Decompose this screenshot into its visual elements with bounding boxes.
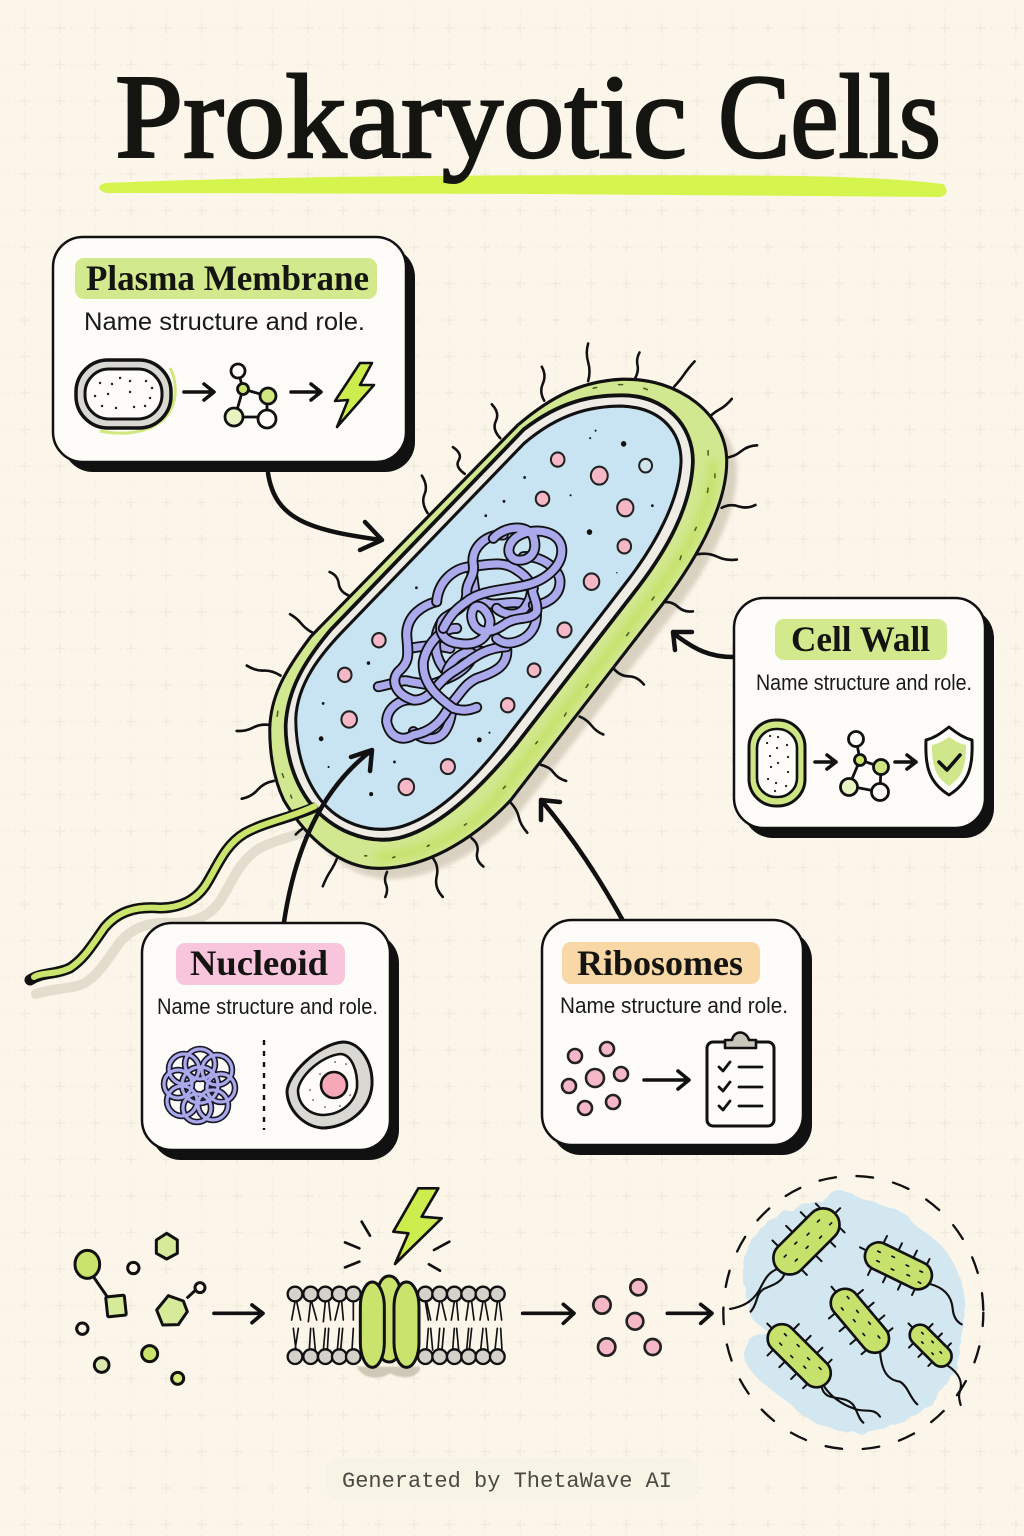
icon: DNA knot bbox=[164, 1049, 235, 1122]
panel: cell wall bbox=[734, 598, 994, 838]
flagellum shadow bbox=[36, 825, 325, 994]
bacterium 3 bbox=[814, 1273, 901, 1364]
bacterium 2 bbox=[851, 1228, 940, 1301]
energy bolt with rays bbox=[345, 1188, 449, 1271]
wall wash bbox=[375, 461, 713, 858]
arrow bbox=[895, 755, 916, 769]
panel: ribosomes bbox=[542, 920, 812, 1155]
arrow bbox=[523, 1304, 574, 1323]
arrow bbox=[644, 1071, 689, 1089]
icon: shield bbox=[926, 727, 972, 795]
icon: ribosome cluster bbox=[562, 1042, 628, 1115]
arrow: nucleoid bbox=[284, 750, 372, 922]
heading highlight bbox=[775, 619, 947, 660]
membrane channel bbox=[288, 1276, 505, 1378]
description: Name structure and role. bbox=[157, 994, 378, 1019]
footer credit: Generated by ThetaWave AI bbox=[342, 1469, 672, 1494]
icon: lightning bolt bbox=[335, 363, 374, 427]
heading: Nucleoid bbox=[190, 943, 328, 983]
icon: membrane capsule bbox=[76, 360, 175, 433]
channel shadow bbox=[357, 1367, 420, 1378]
bacterium 5 bbox=[897, 1312, 960, 1375]
arrow: ribosomes bbox=[541, 800, 622, 919]
cell shadow bbox=[280, 390, 737, 879]
arrow: cell wall bbox=[673, 632, 733, 657]
panel: nucleoid bbox=[142, 923, 399, 1160]
pili bbox=[237, 344, 757, 897]
icon: molecule network bbox=[225, 364, 276, 428]
ribosomes bbox=[338, 452, 652, 795]
molecule: ball and square bbox=[75, 1250, 126, 1317]
plasma membrane bbox=[286, 395, 693, 840]
heading highlight bbox=[75, 258, 377, 299]
wall speckles bbox=[277, 385, 715, 858]
title bbox=[100, 50, 946, 196]
molecule: hexagons and dots bbox=[77, 1233, 205, 1384]
heading: Plasma Membrane bbox=[86, 258, 369, 298]
footer credit bbox=[326, 1458, 698, 1500]
description: Name structure and role. bbox=[84, 308, 365, 336]
outcome group bbox=[523, 1176, 983, 1449]
heading: Ribosomes bbox=[577, 943, 743, 983]
flagellum bbox=[30, 806, 315, 980]
description: Name structure and role. bbox=[560, 993, 788, 1018]
arrow bbox=[184, 384, 214, 400]
lipid heads bbox=[288, 1287, 505, 1364]
icon: cell cross-section bbox=[287, 1042, 372, 1128]
flagella bbox=[730, 1268, 962, 1423]
nucleoid DNA bbox=[378, 528, 562, 739]
heading highlight bbox=[562, 942, 760, 984]
panel: plasma membrane bbox=[53, 237, 415, 472]
lipid tails bbox=[292, 1302, 502, 1350]
cytoplasm granules bbox=[319, 430, 654, 796]
title: Cells bbox=[718, 50, 941, 183]
description: Name structure and role. bbox=[756, 670, 972, 695]
ribosome dots bbox=[593, 1279, 661, 1356]
heading highlight bbox=[176, 943, 345, 985]
dashed boundary bbox=[723, 1176, 983, 1449]
icon: molecule network bbox=[840, 732, 888, 800]
cytoplasm bbox=[296, 406, 681, 829]
watercolor wash bbox=[743, 1191, 965, 1433]
arrow: plasma membrane bbox=[268, 473, 382, 550]
wall outline bbox=[270, 379, 727, 868]
title: Prokaryotic bbox=[115, 50, 687, 183]
arrow bbox=[667, 1304, 712, 1323]
cell wall bbox=[270, 379, 727, 868]
bacterium 4 bbox=[751, 1308, 842, 1399]
molecules group bbox=[75, 1188, 505, 1384]
icon: cell wall capsule bbox=[749, 720, 805, 806]
divider bbox=[263, 1040, 265, 1130]
channel protein bbox=[360, 1276, 419, 1367]
title underline bbox=[100, 176, 946, 196]
heading: Cell Wall bbox=[791, 619, 930, 659]
bacterium 1 bbox=[760, 1190, 857, 1287]
arrow bbox=[815, 755, 836, 769]
arrow bbox=[214, 1305, 263, 1323]
arrow bbox=[291, 384, 321, 400]
bacterial cell diagram bbox=[237, 344, 757, 897]
icon: clipboard bbox=[707, 1032, 774, 1126]
